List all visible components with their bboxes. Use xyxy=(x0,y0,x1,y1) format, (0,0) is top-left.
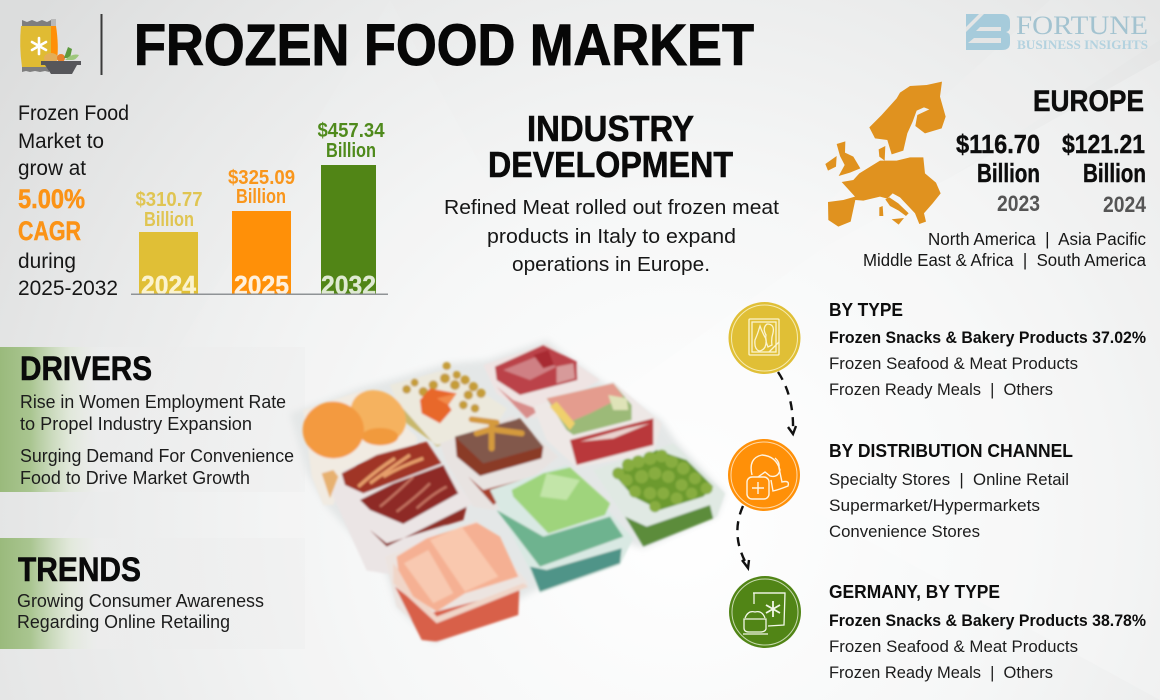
tray: orange slices xyxy=(303,380,417,505)
header divider xyxy=(100,14,102,75)
bar 2025: 2025 xyxy=(234,270,289,300)
panel: drivers: DRIVERS xyxy=(20,350,152,388)
panel: trends xyxy=(0,538,305,649)
bar 2032: $457.34 xyxy=(318,120,385,142)
segment: by type: Frozen Snacks & Bakery Products 37.02% xyxy=(829,329,1146,347)
CAGR text block: during xyxy=(18,249,76,273)
segment: by type: Frozen Ready Meals | Others xyxy=(829,381,1053,399)
icon: germany by type circle xyxy=(729,576,801,648)
panel: drivers: Rise in Women Employment Rate xyxy=(20,392,286,412)
panel: drivers: Food to Drive Market Growth xyxy=(20,468,250,488)
logo: Fortune Business Insights: FORTUNE xyxy=(1016,11,1148,40)
bar 2024: 2024 xyxy=(141,270,197,300)
tray: sliced meat and layered block xyxy=(533,382,662,467)
tray: salmon xyxy=(385,520,528,643)
Europe market values xyxy=(956,85,1147,217)
CAGR text block: Frozen Food xyxy=(18,101,129,125)
bar 2032: 2032 xyxy=(321,270,376,300)
CAGR text block: CAGR xyxy=(18,216,81,246)
segment: germany by type xyxy=(829,582,1146,682)
other regions xyxy=(863,229,1146,270)
icon: by type circle xyxy=(728,302,800,374)
arrow: distribution channel to germany xyxy=(737,506,749,568)
segment: by distribution channel: BY DISTRIBUTION CHANNEL xyxy=(829,441,1073,461)
segment: by distribution channel xyxy=(829,441,1073,541)
title: FROZEN FOOD MARKET xyxy=(134,13,754,78)
industry development paragraph: Refined Meat rolled out frozen meat xyxy=(444,196,779,219)
other regions: Middle East & Africa | South America xyxy=(863,250,1146,270)
Europe market values: 2023 xyxy=(997,191,1040,216)
segment: germany by type: Frozen Snacks & Bakery Products 38.78% xyxy=(829,612,1146,630)
segment: by distribution channel: Supermarket/Hypermarkets xyxy=(829,497,1040,515)
Europe market values: 2024 xyxy=(1103,192,1147,217)
segment: by type: Frozen Seafood & Meat Products xyxy=(829,355,1078,373)
logo: Fortune Business Insights: BUSINESS INSIGHTS xyxy=(1017,37,1148,52)
panel: drivers: Surging Demand For Convenience xyxy=(20,446,294,466)
logo: Fortune Business Insights xyxy=(966,11,1148,52)
panel: trends: TRENDS xyxy=(18,551,141,589)
CAGR text block: grow at xyxy=(18,156,86,180)
panel: drivers: to Propel Industry Expansion xyxy=(20,414,252,434)
CAGR text block xyxy=(18,101,129,300)
bar 2032 xyxy=(318,120,385,300)
segment: germany by type: GERMANY, BY TYPE xyxy=(829,582,1000,602)
CAGR text block: Market to xyxy=(18,129,104,153)
segment: by distribution channel: Specialty Stores | Online Retail xyxy=(829,471,1069,489)
industry development paragraph: operations in Europe. xyxy=(512,253,710,276)
tray: amber bits xyxy=(390,362,507,447)
bar 2025 xyxy=(228,167,295,300)
segment: by type xyxy=(829,300,1146,399)
panel: drivers xyxy=(0,347,305,492)
tray: green block xyxy=(490,465,633,593)
arrow: by type to distribution channel xyxy=(778,372,796,434)
Europe market values: $116.70 xyxy=(956,129,1040,159)
panel: trends: Regarding Online Retailing xyxy=(17,612,230,632)
bar 2024: Billion xyxy=(144,209,194,231)
heading: industry development: DEVELOPMENT xyxy=(488,144,733,185)
bar chart: market size xyxy=(131,120,388,300)
segment: germany by type: Frozen Ready Meals | Others xyxy=(829,664,1053,682)
header icon: frozen food bag and bowl xyxy=(20,19,81,74)
map: Europe xyxy=(825,82,946,227)
Europe market values: Billion xyxy=(977,158,1040,188)
heading: industry development xyxy=(488,108,733,185)
bar 2025: $325.09 xyxy=(228,167,295,189)
other regions: North America | Asia Pacific xyxy=(928,229,1146,249)
tray: brown block with sticks xyxy=(440,416,558,510)
heading: industry development: INDUSTRY xyxy=(527,108,694,149)
bar 2032: Billion xyxy=(326,140,376,162)
bar 2025: Billion xyxy=(236,186,286,208)
tray: red meat xyxy=(483,343,600,418)
industry development paragraph xyxy=(444,196,779,276)
tray: green peas xyxy=(593,443,725,547)
Europe market values: EUROPE xyxy=(1033,85,1144,118)
bar 2024: $310.77 xyxy=(136,189,202,211)
CAGR text block: 2025-2032 xyxy=(18,276,118,300)
segment: by type: BY TYPE xyxy=(829,300,903,320)
illustration: frozen food trays xyxy=(290,340,725,643)
Europe market values: $121.21 xyxy=(1062,129,1145,159)
industry development paragraph: products in Italy to expand xyxy=(487,225,736,248)
bar 2024 xyxy=(136,189,202,300)
segment: germany by type: Frozen Seafood & Meat Products xyxy=(829,638,1078,656)
CAGR text block: 5.00% xyxy=(18,184,85,214)
segment: by distribution channel: Convenience Stores xyxy=(829,523,980,541)
panel: trends: Growing Consumer Awareness xyxy=(17,591,264,611)
icon: distribution channel circle xyxy=(728,439,800,511)
tray: glazed meat xyxy=(332,442,472,574)
